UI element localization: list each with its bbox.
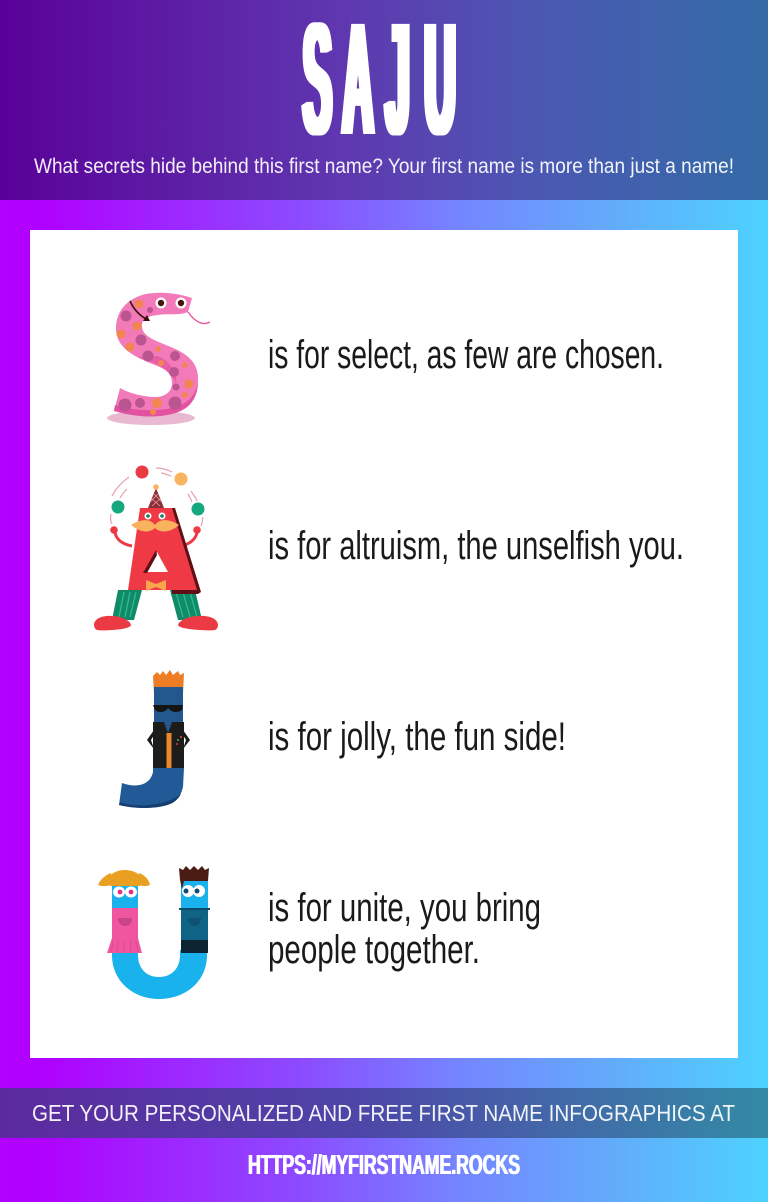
header band [0, 0, 768, 200]
footer band [0, 1088, 768, 1138]
icon: letter J man [119, 670, 190, 808]
icon: letter S snake [107, 293, 210, 425]
caption U: people together. [268, 928, 480, 972]
footer url: HTTPS://MYFIRSTNAME.ROCKS [248, 1149, 520, 1180]
icon: letter U couple [98, 866, 210, 999]
caption U: is for unite, you bring [268, 886, 541, 930]
caption J: is for jolly, the fun side! [268, 715, 566, 759]
icon: letter A juggler [94, 466, 218, 630]
panel: white card [30, 230, 738, 1058]
